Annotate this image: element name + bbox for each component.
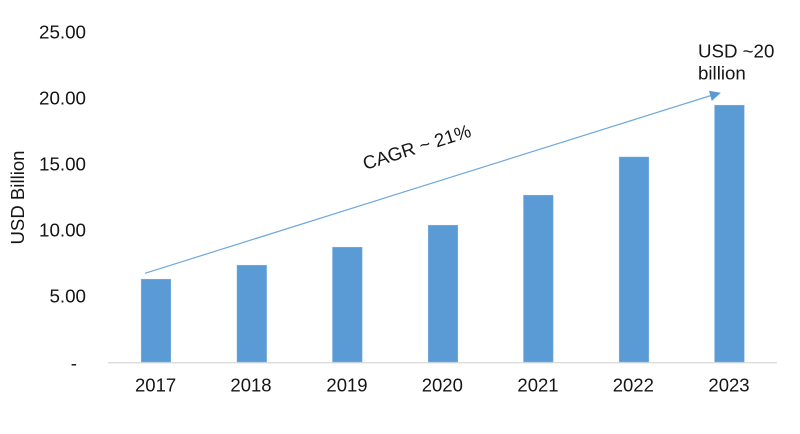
growth arrow	[145, 91, 721, 273]
y axis labels: 25.00	[39, 21, 86, 42]
x axis labels: 2023	[708, 375, 750, 396]
callout: USD ~20	[698, 40, 774, 61]
bars	[141, 105, 744, 362]
y axis labels: 5.00	[49, 286, 86, 307]
y axis labels: 10.00	[39, 219, 86, 240]
CAGR label: CAGR ~ 21%	[360, 120, 473, 174]
x axis line	[108, 362, 777, 364]
y axis title: USD Billion	[7, 150, 28, 245]
y axis labels: 20.00	[39, 88, 86, 108]
y axis labels: -	[71, 352, 77, 374]
y axis labels	[39, 21, 86, 374]
x axis labels: 2022	[613, 375, 654, 396]
x axis labels: 2021	[517, 375, 559, 396]
y axis labels: 15.00	[39, 154, 86, 174]
x axis labels	[135, 375, 750, 396]
x axis labels: 2018	[230, 375, 272, 396]
x axis labels: 2020	[422, 375, 463, 396]
callout: billion	[698, 62, 746, 83]
x axis labels: 2019	[326, 375, 368, 396]
x axis labels: 2017	[135, 375, 176, 396]
